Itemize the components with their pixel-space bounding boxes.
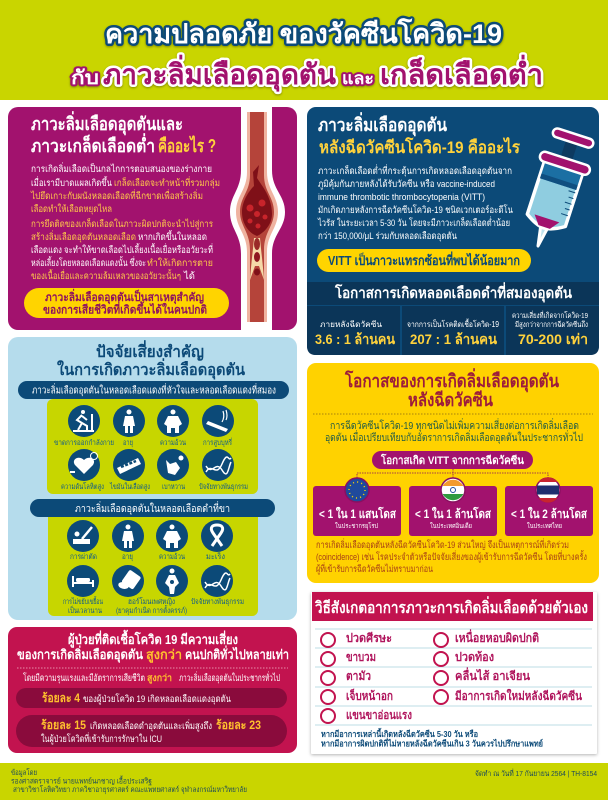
credits: รองศาสตราจารย์ นายแพทย์นภชาญ เอื้อประเสริฐ — [11, 776, 152, 786]
body text: เมื่อเรามีบาดแผลเกิดขึ้น — [31, 176, 112, 189]
heading: ปัจจัยเสี่ยงสำคัญ — [96, 340, 204, 362]
heading: หลังฉีดวัคซีน — [408, 390, 494, 410]
body text: สร้างลิ่มเลือดอุดตันหลอดเลือด — [31, 230, 136, 243]
icon: smoking — [202, 405, 234, 447]
pill: arterial thrombosis — [18, 381, 289, 399]
heading: ภาวะเกล็ดเลือดต่ำ — [31, 133, 155, 156]
checklist column 1: ขาบวม — [346, 650, 376, 664]
card: Europe: < 1 ใน 1 แสนโดส — [319, 506, 397, 521]
pill: venous thrombosis — [30, 499, 275, 517]
stat pill: 15 and 23 percent — [16, 715, 287, 747]
title lines: ภาวะลิ่มเลือดอุดตัน — [103, 54, 336, 92]
icon: blood vessel with clot — [230, 112, 285, 322]
label: ขาดการออกกำลังกาย — [54, 438, 114, 447]
footnote text: ผู้ที่เข้ารับการฉีดวัคซีนไม่ทราบมาก่อน — [316, 562, 433, 575]
label: การผ่าตัด — [70, 552, 97, 561]
checklist column 1: เจ็บหน้าอก — [346, 688, 393, 703]
note — [321, 727, 543, 748]
stat: after vaccination: 3.6 : 1 ล้านคน — [315, 331, 395, 347]
label: ปัจจัยทางพันธุกรรม — [199, 482, 248, 491]
heading — [57, 340, 245, 380]
stat pill: 4 percent — [16, 688, 287, 708]
callout: leading cause of death — [24, 288, 229, 318]
icon: hormones — [112, 565, 187, 615]
callout: leading cause of death: ภาวะลิ่มเลือดอุดตันเป็นสาเหตุสำคัญ — [45, 288, 204, 305]
title lines: เกล็ดเลือดต่ำ — [380, 54, 543, 90]
pill: VITT chance: โอกาสเกิด VITT จากการฉีดวัคซีน — [380, 453, 524, 467]
body text: เลือดทำให้เลือดหยุดไหล — [31, 203, 112, 215]
subheading: โดยมีความรุนแรงและมีอัตราการเสียชีวิต — [23, 672, 145, 684]
olive sheet: arterial factors — [47, 399, 258, 494]
label: อายุ — [123, 438, 133, 447]
olive sheet: venous factors — [48, 510, 258, 616]
stat pill: 15 and 23 percent: ในผู้ป่วยโควิดที่เข้ารับการรักษาใน ICU — [41, 732, 162, 745]
heading — [17, 629, 289, 663]
checklist column 1 — [321, 631, 412, 723]
label — [63, 596, 103, 615]
title lines: และ — [342, 69, 374, 88]
title lines: กับ — [71, 68, 99, 89]
header — [312, 592, 593, 621]
label: ความอ้วน — [159, 552, 185, 561]
card: Thailand: ในประเทศไทย — [527, 522, 562, 530]
body text: มักเกิดภายหลังการฉีดวัคซีนโควิด-19 ชนิดเวกเตอร์อะดีโน — [318, 204, 513, 216]
body text: ได้ — [183, 270, 195, 282]
credits — [11, 768, 247, 794]
checklist column 1: ตามัว — [346, 669, 371, 683]
body text: เกล็ดเลือดจะทำหน้าที่รวมกลุ่ม — [114, 176, 220, 189]
icon: age — [113, 405, 145, 447]
title banner — [0, 0, 608, 100]
body text: เลือดแดง จะทำให้ขาดเลือดไปเลี้ยงเนื้อเยื่อหรืออวัยวะที่ — [31, 243, 213, 256]
heading — [344, 368, 560, 410]
heading: โอกาสของการเกิดลิ่มเลือดอุดตัน — [344, 368, 560, 393]
icon: obesity — [156, 520, 188, 561]
pill: venous thrombosis: ภาวะลิ่มเลือดอุดตันในหลอดเลือดดำที่ขา — [75, 501, 230, 515]
subheading — [23, 671, 280, 685]
panel: chance after vaccination — [307, 363, 599, 583]
label — [116, 597, 187, 615]
stat: relative risk: ความเสี่ยงที่เกิดจากโควิด-19 — [512, 310, 588, 320]
label: มะเร็ง — [206, 551, 225, 561]
icon: cancer ribbon — [201, 520, 233, 561]
heading: สูงกว่า — [146, 647, 182, 663]
label: ไขมันในเลือดสูง — [109, 482, 150, 491]
stats row — [307, 306, 599, 355]
heading: คนปกติทั่วไปหลายเท่า — [185, 645, 289, 662]
label: การสูบบุหรี่ — [203, 437, 232, 447]
panel: risk factors — [8, 337, 297, 620]
checklist column 2: คลื่นไส้ อาเจียน — [455, 667, 531, 683]
checklist column 2: เหนื่อยหอบผิดปกติ — [455, 629, 539, 645]
label: เป็นเวลานาน — [68, 605, 102, 615]
heading — [31, 111, 216, 156]
callout: VITT is rare: VITT เป็นภาวะแทรกซ้อนที่พบได้น้อยมาก — [328, 251, 520, 268]
panel: what is thrombosis — [8, 107, 297, 330]
icon: high cholesterol — [109, 449, 150, 491]
label: (ยาคุมกำเนิด การตั้งครรภ์) — [116, 605, 187, 615]
panel: COVID patients' risk — [8, 627, 297, 753]
body text: กว่า 150,000/μL ร่วมกับหลอดเลือดอุดตัน — [318, 231, 457, 242]
title lines — [71, 17, 543, 92]
note: หากมีอาการผิดปกติที่ไม่หายหลังฉีดวัคซีนเกิน 3 วันควรไปปรึกษาแพทย์ — [321, 736, 543, 748]
checklist column 2: ปวดท้อง — [455, 650, 494, 664]
heading: ของการเกิดลิ่มเลือดอุดตัน — [17, 645, 143, 663]
heading: ในการเกิดภาวะลิ่มเลือดอุดตัน — [57, 358, 245, 380]
stat: from COVID-19: 207 : 1 ล้านคน — [410, 331, 497, 347]
stat: relative risk: มีสูงกว่าจากการฉีดวัคซีนถึง — [515, 320, 588, 329]
credits: สาขาวิชาโลหิตวิทยา ภาควิชาอายุรศาสตร์ คณะแพทยศาสตร์ จุฬาลงกรณ์มหาวิทยาลัย — [13, 785, 247, 794]
label: ความอ้วน — [160, 438, 186, 447]
label: ฮอร์โมนเพศหญิง — [128, 597, 175, 606]
body text: ภูมิคุ้มกันภายหลังได้รับวัคซีน หรือ vaccine-induced — [318, 178, 495, 190]
title lines: ความปลอดภัย ของวัคซีนโควิด-19 — [105, 17, 502, 49]
icon: genetics — [191, 565, 244, 606]
note: หากมีอาการเหล่านี้เกิดหลังฉีดวัคซีน 5-30 วัน หรือ — [321, 727, 478, 739]
label: การไม่ขยับเขยื้อน — [63, 596, 103, 606]
heading: คืออะไร ? — [158, 135, 216, 156]
icon: immobility — [63, 565, 103, 615]
body text: การเกิดลิ่มเลือดเป็นกลไกการตอบสนองของร่างกาย — [31, 162, 212, 175]
icon: genetics — [199, 449, 248, 491]
pill: arterial thrombosis: ภาวะลิ่มเลือดอุดตันในหลอดเลือดแดงที่หัวใจและหลอดเลือดแดงที่สมอง — [32, 382, 276, 396]
callout: leading cause of death: ของการเสียชีวิตที่เกิดขึ้นได้ในคนปกติ — [43, 300, 207, 316]
footnote text — [316, 538, 587, 575]
heading: ผู้ป่วยที่ติดเชื้อโควิด 19 มีความเสี่ยง — [68, 629, 238, 648]
body text: หล่อเลี้ยงโดยหลอดเลือดแดงนั้น ซึ่งจะ — [31, 256, 146, 269]
icon: pregnancy — [156, 565, 188, 597]
stat: relative risk — [512, 310, 588, 347]
checklist column 1: แขนขาอ่อนแรง — [346, 708, 412, 722]
body text: การยึดติดของเกล็ดเลือดในภาวะผิดปกติจะนำไปสู่การ — [31, 217, 213, 230]
heading band: cerebral venous thrombosis — [307, 282, 599, 305]
credits: ข้อมูลโดย — [11, 768, 37, 777]
body text: หากเกิดขึ้นในหลอด — [138, 230, 207, 243]
stat: after vaccination: ภายหลังฉีดวัคซีน — [320, 320, 383, 329]
card: India: < 1 ใน 1 ล้านโดส — [415, 506, 492, 521]
label: ความดันโลหิตสูง — [61, 482, 104, 491]
label: เบาหวาน — [162, 482, 185, 491]
heading: หลังฉีดวัคซีนโควิด-19 คืออะไร — [319, 137, 521, 157]
checklist column 2 — [434, 629, 583, 704]
stat: from COVID-19: จากการเป็นโรคติดเชื้อโควิด-19 — [407, 318, 499, 329]
card: Thailand: < 1 ใน 2 ล้านโดส — [511, 506, 588, 521]
card: Europe: ในประชากรยุโรป — [335, 522, 378, 530]
icon: diabetes — [157, 449, 189, 491]
checklist column 2: มีอาการเกิดใหม่หลังฉีดวัคซีน — [455, 688, 583, 703]
heading: ภาวะลิ่มเลือดอุดตันและ — [31, 111, 183, 136]
icon: high blood pressure — [61, 449, 104, 491]
callout: VITT is rare — [317, 249, 531, 272]
stat pill: 15 and 23 percent: ร้อยละ 23 — [216, 718, 261, 732]
icon: surgery — [67, 520, 99, 561]
body text — [325, 418, 583, 444]
body text: ของเนื้อเยื่อและความล้มเหลวของอวัยวะนั้นๆ — [31, 269, 181, 282]
body text — [30, 162, 220, 282]
card: Thailand — [505, 477, 593, 536]
stat: relative risk: 70-200 เท่า — [518, 331, 588, 347]
subheading: ภาวะลิ่มเลือดอุดตันในประชากรทั่วไป — [179, 671, 280, 684]
body text: ไวรัส ในระยะเวลา 5-30 วัน โดยจะมีภาวะเกล็ดเลือดต่ำน้อย — [317, 216, 510, 229]
icon: age — [112, 520, 144, 561]
stat pill: 15 and 23 percent: เกิดหลอดเลือดดำอุดตันและเพิ่มสูงถึง — [90, 719, 212, 732]
stat: after vaccination — [315, 320, 395, 347]
stat pill: 4 percent: ร้อยละ 4 — [42, 691, 80, 705]
heading band: cerebral venous thrombosis: โอกาสการเกิดหลอดเลือดดำที่สมองอุดตัน — [334, 282, 573, 303]
label: ปัจจัยทางพันธุกรรม — [191, 597, 244, 606]
body text: immune thrombotic thrombocytopenia (VITT) — [318, 192, 485, 203]
body text: ทำให้เกิดการตาย — [147, 257, 213, 269]
heading — [318, 112, 521, 157]
footer band — [0, 763, 608, 800]
body text: ภาวะเกล็ดเลือดต่ำที่กระตุ้นการเกิดหลอดเลือดอุดตันจาก — [318, 164, 512, 177]
pill: VITT chance — [372, 451, 533, 469]
heading: ภาวะลิ่มเลือดอุดตัน — [318, 112, 448, 137]
stat pill: 4 percent: ของผู้ป่วยโควิด 19 เกิดหลอดเลือดแดงอุดตัน — [83, 693, 231, 705]
body text: ไปยึดเกาะกับผนังหลอดเลือดที่ฉีกขาดเพื่อสร้างลิ่ม — [30, 189, 203, 202]
subheading: สูงกว่า — [147, 673, 172, 685]
card: India — [409, 478, 497, 536]
icon: syringe — [513, 126, 599, 254]
stat: from COVID-19 — [407, 318, 499, 347]
icon: obesity — [157, 405, 189, 447]
body text — [317, 164, 513, 242]
icon: lack of exercise — [54, 405, 114, 447]
checklist column 1: ปวดศีรษะ — [346, 631, 392, 645]
card: Europe — [313, 478, 401, 536]
stat pill: 15 and 23 percent: ร้อยละ 15 — [41, 718, 86, 732]
card: India: ในประเทศอินเดีย — [430, 522, 472, 530]
panel: symptom checklist — [311, 592, 597, 754]
label: อายุ — [122, 552, 133, 561]
panel: VITT after vaccination — [307, 107, 599, 355]
